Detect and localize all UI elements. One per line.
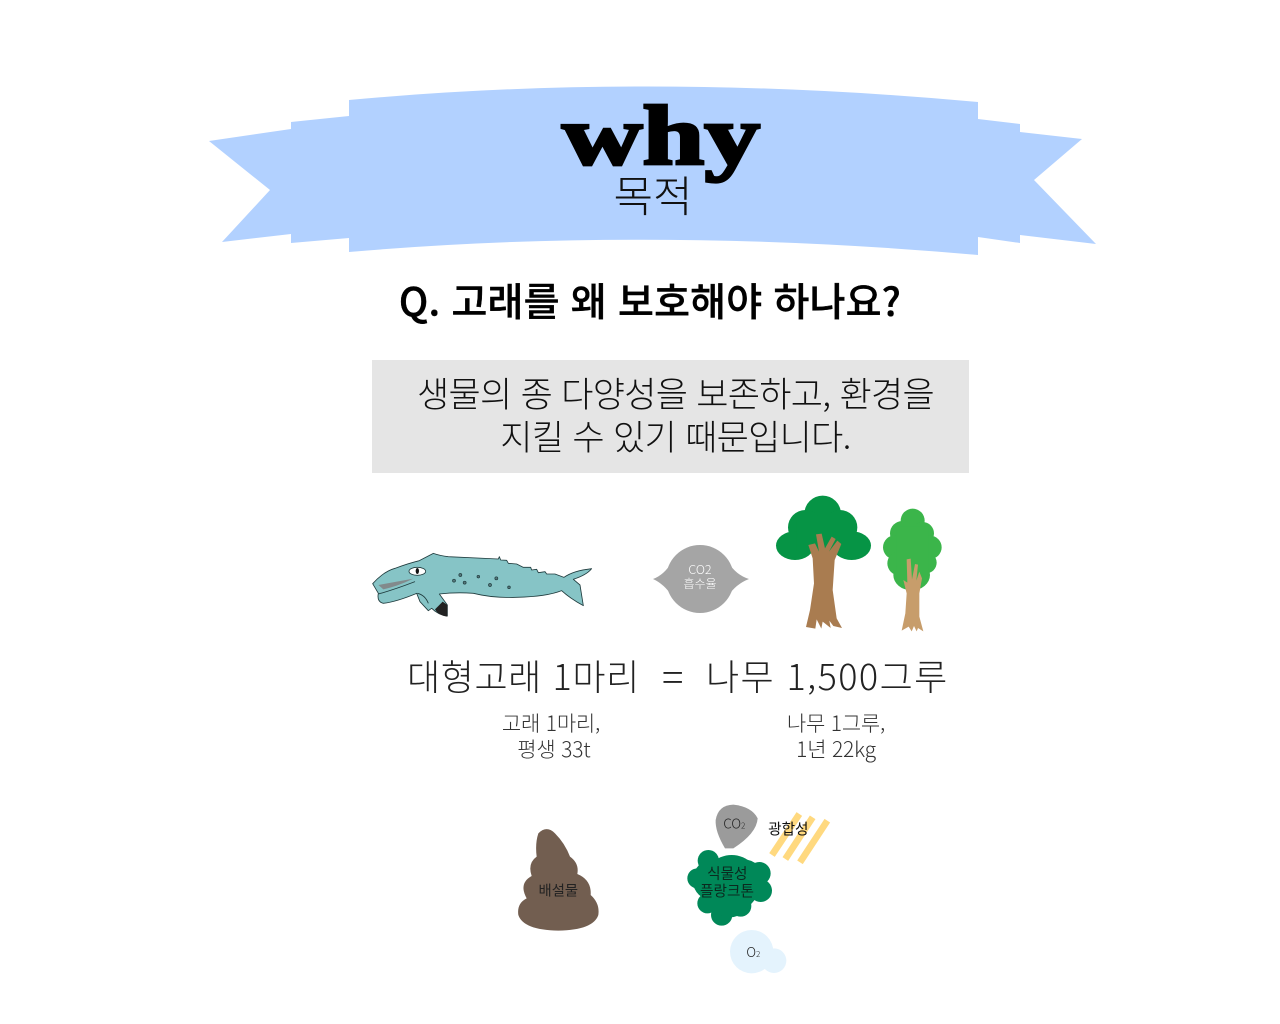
caption: tree: 1년 22kg [796,734,876,764]
icon: excrement [518,829,599,931]
photosynthesis diagram [687,804,830,974]
phytoplankton blob: 플랑크톤 [700,880,754,901]
CO2 blob [716,805,758,848]
phytoplankton blob [687,850,772,926]
icon: whale [372,552,592,617]
equation text: 대형고래 1마리 [407,649,640,701]
caption: tree: 나무 1그루, [787,708,885,738]
O2 bubble [730,930,786,973]
icon: trees [776,496,942,632]
answer box: 지킬 수 있기 때문입니다. [500,410,851,461]
equation text: = [662,646,683,704]
subtitle: 목적 [613,163,693,225]
title: why: why [562,89,760,183]
CO2 blob: CO2 [723,814,745,833]
equation text [407,646,949,704]
caption: whale: 평생 33t [517,734,590,764]
phytoplankton blob: 식물성 [707,862,748,883]
equation text: 나무 1,500그루 [706,649,949,701]
question heading: Q. 고래를 왜 보호해야 하나요? [399,272,901,328]
O2 bubble: O2 [746,942,760,961]
banner ribbon [209,86,1096,255]
icon: CO2 absorption bubble: 흡수율 [683,575,717,592]
answer box: 생물의 종 다양성을 보존하고, 환경을 [417,367,934,418]
answer box [372,360,969,473]
caption: whale [502,708,600,764]
icon: excrement: 배설물 [539,880,578,901]
sunlight rays [772,814,827,862]
photosynthesis label: 광합성 [768,818,809,839]
caption: whale: 고래 1마리, [502,708,600,738]
icon: CO2 absorption bubble [653,545,749,613]
icon: CO2 absorption bubble: CO2 [688,559,712,578]
caption: tree [787,708,885,764]
